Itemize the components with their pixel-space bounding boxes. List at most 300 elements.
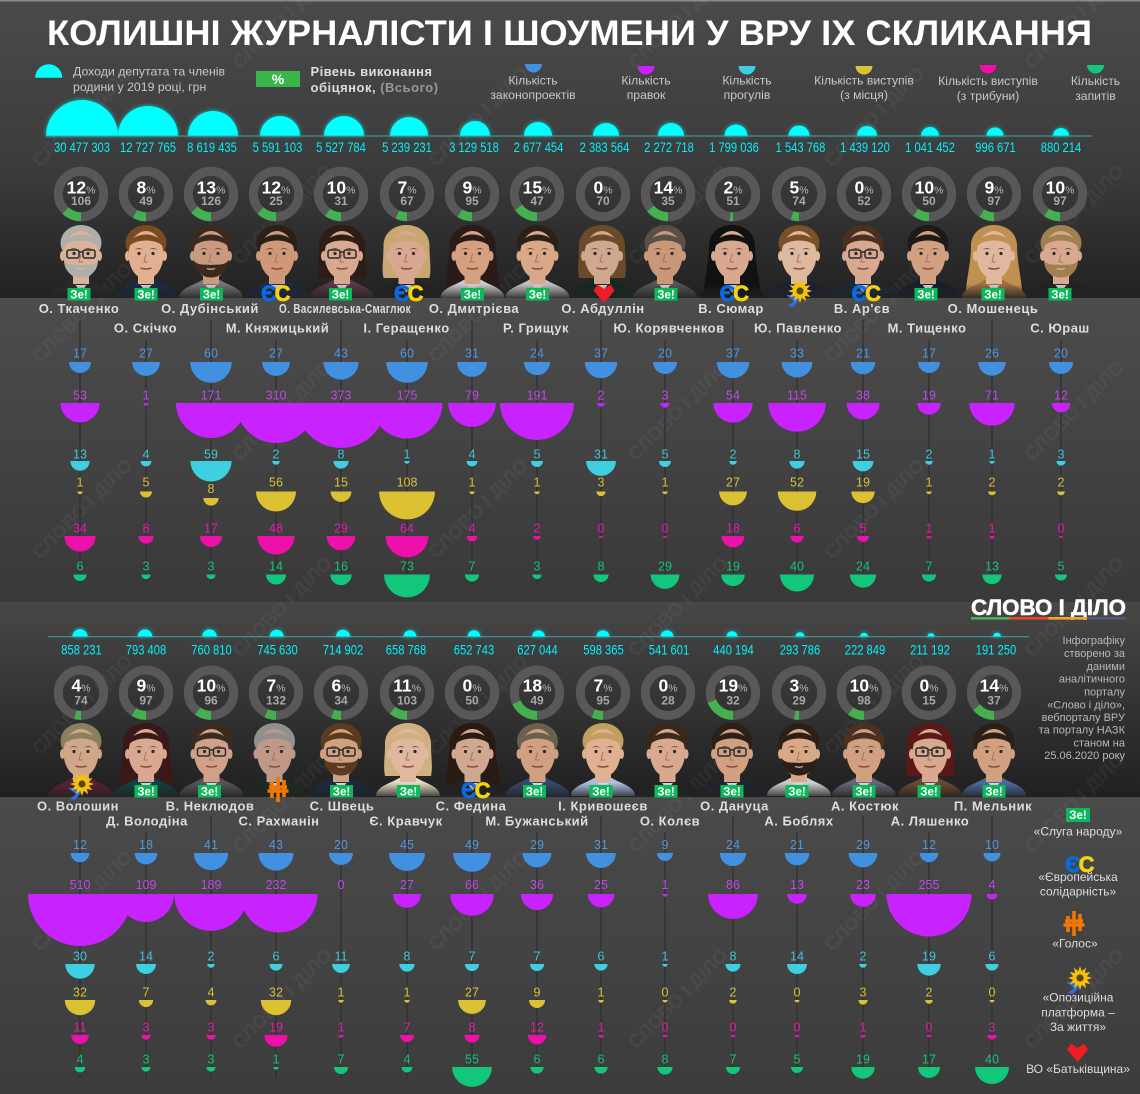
- party badges: top row: ЄС: [720, 281, 749, 306]
- promise rings: top row: 31: [334, 194, 348, 208]
- legend: promise fulfilment: %: [272, 71, 285, 87]
- activity column: О. Волошин: 30: [73, 950, 87, 964]
- source note: станом на: [1073, 738, 1126, 750]
- legend: absences: [722, 66, 772, 102]
- names: bottom row: О. Колєв: [640, 814, 700, 828]
- activity column: Д. Володіна: 14: [139, 950, 153, 964]
- promise rings: bottom row: 32: [726, 694, 740, 708]
- activity column: С. Федина: [450, 816, 494, 1087]
- activity column: І. Кривошеєв: 6: [598, 950, 605, 964]
- promise rings: top row: 106: [71, 194, 91, 208]
- promise rings: top row: 14%: [654, 178, 682, 198]
- activity column: О. Дануца: 0: [730, 1020, 737, 1034]
- activity column: Ю. Павленко: 6: [794, 522, 801, 536]
- activity column: А. Боблях: 0: [794, 986, 801, 1000]
- income chart: bottom row: 858 231: [61, 642, 102, 658]
- watermarks: СЛОВО І ДІЛО: [821, 847, 929, 956]
- promise rings: top row: 13%: [197, 178, 225, 198]
- activity column: М. Тищенко: 2: [926, 448, 933, 462]
- activity column: Є. Кравчук: 45: [400, 838, 414, 852]
- activity column: В. Сюмар: 27: [726, 476, 740, 490]
- activity column: Ю. Павленко: 115: [787, 388, 807, 402]
- income chart: bottom row: 222 849: [845, 642, 885, 658]
- income chart: bottom row: 598 365: [583, 642, 624, 658]
- activity column: М. Бужанський: [521, 832, 553, 1078]
- names: top row: О. Скічко: [114, 320, 177, 336]
- names: top row: [39, 301, 1090, 336]
- income chart: top row: 1 041 452: [905, 140, 955, 155]
- activity column: В. Неклюдов: 4: [208, 986, 215, 1000]
- legend: promise fulfilment: Рівень виконання: [310, 64, 432, 79]
- activity column: І. Геращенко: 64: [400, 522, 414, 536]
- activity column: С. Швець: 1: [338, 1020, 345, 1034]
- names: top row: О. Абдуллін: [561, 301, 645, 316]
- names: bottom row: А. Костюк: [831, 798, 899, 814]
- watermarks: СЛОВО І ДІЛО: [229, 749, 337, 858]
- activity column: О. Волошин: 32: [73, 986, 87, 1000]
- activity column: О. Абдуллін: 31: [594, 448, 608, 462]
- activity column: М. Княжицький: 48: [269, 522, 283, 536]
- activity column: А. Костюк: 1: [860, 1020, 867, 1034]
- party legend: Голос: [1052, 911, 1098, 950]
- activity column: В. Ар'єв: [846, 320, 880, 588]
- party legend: Європейська солідарність: ЄС: [1065, 852, 1095, 877]
- activity column: С. Швець: 7: [338, 1052, 345, 1066]
- activity column: А. Ляшенко: 0: [926, 1020, 933, 1034]
- promise rings: bottom row: 29: [792, 694, 806, 708]
- activity column: О. Дмитрієва: 4: [469, 448, 476, 462]
- source note: та порталу НАЗК: [1039, 724, 1126, 736]
- activity column: О. Дмитрієва: 31: [465, 346, 479, 360]
- promise rings: top row: 7%: [397, 178, 417, 198]
- names: bottom row: А. Ляшенко: [891, 814, 969, 828]
- promise rings: bottom row: 49: [530, 694, 544, 708]
- promise rings: top row: 10%: [327, 178, 355, 198]
- names: bottom row: П. Мельник: [954, 798, 1032, 814]
- activity column: О. Дануца: [708, 816, 758, 1078]
- party badges: top row: Зе!: [464, 290, 481, 302]
- activity column: О. Дануца: 2: [730, 986, 737, 1000]
- promise rings: top row: 97: [1053, 194, 1067, 208]
- activity column: А. Костюк: 3: [860, 986, 867, 1000]
- activity column: Р. Грищук: 1: [534, 476, 541, 490]
- activity column: О. Дмитрієва: 79: [465, 388, 479, 402]
- activity column: В. Неклюдов: 2: [208, 950, 215, 964]
- activity column: М. Бужанський: 36: [530, 878, 544, 892]
- watermarks: СЛОВО І ДІЛО: [1021, 945, 1129, 1054]
- activity column: О. Дубінський: [176, 320, 246, 585]
- income chart: bottom row: 293 786: [780, 642, 820, 658]
- watermarks: СЛОВО І ДІЛО: [1021, 161, 1129, 270]
- activity column: О. Дануца: 24: [726, 838, 740, 852]
- activity column: Р. Грищук: 24: [530, 346, 544, 360]
- activity column: О. Колєв: 1: [662, 878, 669, 892]
- party legend: Опозиційна платформа: платформа –: [1041, 1006, 1115, 1020]
- activity column: С. Рахманін: [240, 832, 318, 1078]
- activity column: О. Ткаченко: 34: [73, 522, 87, 536]
- legend: bills: законопроектів: [490, 88, 576, 102]
- activity column: М. Тищенко: 1: [926, 522, 933, 536]
- names: top row: М. Княжицький: [226, 320, 329, 336]
- activity column: О. Скічко: 27: [139, 346, 153, 360]
- activity column: С. Рахманін: 232: [266, 878, 286, 892]
- source note: 25.06.2020 року: [1044, 750, 1126, 762]
- activity column: О. Дануца: 8: [730, 950, 737, 964]
- activity column: П. Мельник: 3: [989, 1020, 996, 1034]
- legend: bills: Кількість: [508, 74, 558, 88]
- names: bottom row: Є. Кравчук: [369, 814, 443, 828]
- activity column: Р. Грищук: 3: [534, 560, 541, 574]
- activity column: О. Ткаченко: 1: [77, 476, 84, 490]
- watermarks: СЛОВО І ДІЛО: [229, 161, 337, 270]
- party badges: top row: Зе!: [70, 290, 88, 302]
- activity column: А. Боблях: [785, 832, 809, 1078]
- legend: speeches from rostrum: [938, 65, 1038, 103]
- activity column: І. Геращенко: 73: [400, 560, 414, 574]
- activity column: О. Мошенець: 13: [985, 560, 999, 574]
- activity column: С. Юраш: 3: [1058, 448, 1065, 462]
- source note: порталу: [1084, 686, 1125, 698]
- activity column: І. Геращенко: 1: [404, 448, 411, 462]
- activity column: В. Неклюдов: [174, 816, 248, 1078]
- activity column: О. Ткаченко: 6: [77, 560, 84, 574]
- activity column: С. Федина: 7: [469, 950, 476, 964]
- party legend: Європейська солідарність: [1038, 852, 1118, 898]
- activity column: Ю. Корявченков: 29: [658, 560, 672, 574]
- source note: аналітичного: [1059, 674, 1125, 686]
- activity column: В. Ар'єв: 38: [856, 388, 870, 402]
- promise rings: top row: 25: [269, 194, 283, 208]
- promise rings: bottom row: 7%: [266, 676, 286, 696]
- activity column: В. Ар'єв: 5: [860, 522, 867, 536]
- activity column: А. Боблях: 0: [794, 1020, 801, 1034]
- names: top row: О. Ткаченко: [39, 301, 119, 316]
- watermarks: СЛОВО І ДІЛО: [1021, 553, 1129, 662]
- activity column: Є. Кравчук: 7: [404, 1020, 411, 1034]
- logo: Слово і діло: СЛОВО І ДІЛО: [971, 595, 1126, 620]
- activity column: В. Сюмар: 19: [726, 560, 740, 574]
- activity column: М. Княжицький: 27: [269, 346, 283, 360]
- promise rings: top row: 0%: [593, 178, 613, 198]
- activity column: Ю. Корявченков: 1: [662, 476, 669, 490]
- activity column: О. Волошин: 510: [70, 878, 90, 892]
- activity column: А. Боблях: 21: [790, 838, 804, 852]
- watermarks: СЛОВО І ДІЛО: [821, 259, 929, 368]
- activity column: Д. Володіна: 3: [143, 1052, 150, 1066]
- promise rings: bottom row: 103: [397, 694, 417, 708]
- party legend: Слуга народу: [1034, 808, 1123, 838]
- activity column: С. Федина: 66: [465, 878, 479, 892]
- watermarks: СЛОВО І ДІЛО: [425, 63, 533, 172]
- activity column: І. Кривошеєв: 25: [594, 878, 608, 892]
- activity column: О. Дубінський: 3: [208, 560, 215, 574]
- activity column: А. Костюк: 2: [860, 950, 867, 964]
- names: bottom row: О. Дануца: [700, 798, 769, 814]
- names: top row: О. Дубінський: [161, 301, 259, 316]
- promise rings: top row: 49: [139, 194, 153, 208]
- income chart: top row: 2 383 564: [580, 140, 629, 155]
- legend: promise fulfilment: [256, 64, 439, 95]
- activity column: О. Абдуллін: 37: [594, 346, 608, 360]
- activity column: О. Абдуллін: 3: [598, 476, 605, 490]
- activity column: М. Бужанський: 12: [530, 1020, 544, 1034]
- promise rings: bottom row: [58, 670, 1017, 715]
- names: bottom row: Д. Володіна: [106, 814, 188, 828]
- watermarks: СЛОВО І ДІЛО: [29, 455, 137, 564]
- activity column: О. Волошин: 4: [77, 1052, 84, 1066]
- legend: speeches from seat: [814, 66, 914, 102]
- activity column: О. Дмитрієва: 4: [469, 522, 476, 536]
- portraits: bottom row: [46, 723, 1031, 797]
- promise rings: top row: 97: [987, 194, 1001, 208]
- promise rings: bottom row: 10%: [850, 676, 878, 696]
- activity column: І. Кривошеєв: 31: [594, 838, 608, 852]
- activity column: О. Дубінський: 171: [201, 388, 221, 402]
- activity column: А. Боблях: 14: [790, 950, 804, 964]
- legend: amendments: [621, 66, 671, 102]
- activity column: А. Ляшенко: 19: [922, 950, 936, 964]
- activity column: О. Колєв: 0: [662, 1020, 669, 1034]
- activity column: О. Дубінський: 17: [204, 522, 218, 536]
- activity column: С. Федина: 55: [465, 1052, 479, 1066]
- activity column: Р. Грищук: 5: [534, 448, 541, 462]
- names: bottom row: С. Рахманін: [238, 814, 320, 828]
- party badges: bottom row: Зе!: [985, 786, 1003, 798]
- watermarks: СЛОВО І ДІЛО: [425, 259, 533, 368]
- activity column: О. Дубінський: 8: [208, 482, 215, 496]
- promise rings: bottom row: 95: [596, 694, 610, 708]
- promise rings: bottom row: 18%: [523, 676, 551, 696]
- names: top row: Ю. Корявченков: [613, 320, 725, 336]
- activity column: О. Ткаченко: 53: [73, 388, 87, 402]
- names: top row: М. Тищенко: [888, 320, 966, 336]
- income chart: top row: 996 671: [975, 140, 1016, 155]
- watermarks: СЛОВО І ДІЛО: [625, 553, 733, 662]
- watermarks: СЛОВО І ДІЛО: [625, 161, 733, 270]
- party badges: bottom row: ЄС: [461, 778, 491, 803]
- party badges: bottom row: Зе!: [201, 786, 218, 798]
- activity column: В. Неклюдов: 41: [204, 838, 218, 852]
- activity column: І. Геращенко: 175: [397, 388, 417, 402]
- income chart: top row: 2 272 718: [644, 140, 694, 155]
- activity column: В. Ар'єв: 15: [856, 448, 870, 462]
- activity column: Д. Володіна: 109: [136, 878, 156, 892]
- activity column: С. Швець: 20: [334, 838, 348, 852]
- activity column: О. Дмитрієва: [448, 320, 496, 585]
- party badges: top row: Зе!: [1051, 290, 1069, 302]
- party legend: Батьківщина: ВО «Батьківщина»: [1026, 1062, 1130, 1076]
- activity column: О. Василевська-Смаглюк: 16: [334, 560, 348, 574]
- income chart: bottom row: 191 250: [976, 642, 1016, 658]
- promise rings: top row: 50: [922, 194, 936, 208]
- activity column: П. Мельник: 4: [989, 878, 996, 892]
- activity column: В. Сюмар: [713, 320, 753, 586]
- activity column: А. Костюк: 19: [856, 1052, 870, 1066]
- watermarks: СЛОВО І ДІЛО: [229, 357, 337, 466]
- party legend: Опозиційна платформа: «Опозиційна: [1043, 990, 1114, 1004]
- income chart: top row: 880 214: [1041, 140, 1081, 155]
- promise rings: bottom row: 0%: [919, 676, 939, 696]
- names: top row: С. Юраш: [1030, 320, 1090, 336]
- watermarks: СЛОВО І ДІЛО: [29, 63, 137, 172]
- party legend: Опозиційна платформа: [1041, 966, 1115, 1034]
- activity column: Ю. Корявченков: [651, 340, 679, 589]
- promise rings: top row: 67: [400, 194, 414, 208]
- party badges: bottom row: Зе!: [788, 786, 806, 798]
- watermarks: СЛОВО І ДІЛО: [1021, 357, 1129, 466]
- activity column: С. Рахманін: 1: [273, 1052, 280, 1066]
- names: bottom row: М. Бужанський: [485, 814, 589, 828]
- promise rings: top row: 47: [530, 194, 544, 208]
- activity column: М. Тищенко: 19: [922, 388, 936, 402]
- income chart: top row: 1 439 120: [840, 140, 890, 155]
- activity column: О. Скічко: 8: [143, 522, 150, 536]
- income chart: bottom row: 440 194: [713, 642, 754, 658]
- activity column: М. Бужанський: 7: [534, 950, 541, 964]
- legend: promise fulfilment: обіцянок, (Всього): [310, 80, 439, 95]
- activity column: А. Ляшенко: 255: [919, 878, 939, 892]
- activity column: В. Ар'єв: 24: [856, 560, 870, 574]
- activity column: В. Ар'єв: 19: [856, 476, 870, 490]
- activity column: О. Волошин: 11: [74, 1020, 87, 1034]
- promise rings: bottom row: 37: [987, 694, 1001, 708]
- activity column: О. Василевська-Смаглюк: 43: [334, 346, 348, 360]
- promise rings: top row: 15%: [523, 178, 551, 198]
- activity column: С. Рахманін: 19: [269, 1020, 283, 1034]
- activity column: А. Боблях: 13: [790, 878, 804, 892]
- activity column: М. Тищенко: 7: [926, 560, 933, 574]
- activity column: С. Юраш: 5: [1058, 560, 1065, 574]
- activity column: О. Мошенець: 1: [989, 448, 996, 462]
- party badges: top row: Зе!: [203, 290, 220, 302]
- party badges: top row: Зе!: [984, 290, 1002, 302]
- promise rings: bottom row: 97: [139, 694, 153, 708]
- activity column: О. Колєв: 0: [662, 986, 669, 1000]
- income chart: top row: 30 477 303: [54, 140, 110, 155]
- activity column: Ю. Корявченков: 5: [662, 448, 669, 462]
- activity column: О. Ткаченко: [60, 320, 100, 585]
- activity column: С. Юраш: 0: [1058, 522, 1065, 536]
- activity column: В. Ар'єв: 21: [856, 346, 870, 360]
- promise rings: top row: 95: [465, 194, 479, 208]
- income chart: top row: 12 727 765: [120, 140, 176, 155]
- party legend: Батьківщина: [1026, 1044, 1130, 1076]
- party badges: bottom row: Зе!: [137, 786, 155, 798]
- activity column: О. Дубінський: 59: [204, 448, 218, 462]
- promise rings: top row: 12%: [67, 178, 95, 198]
- title: КОЛИШНІ ЖУРНАЛІСТИ І ШОУМЕНИ У ВРУ ІХ СКЛИКАННЯ: [47, 14, 1092, 53]
- income chart: bottom row: 541 601: [649, 642, 689, 658]
- activity column: Ю. Павленко: 40: [790, 560, 804, 574]
- activity column: Є. Кравчук: 8: [404, 950, 411, 964]
- activity column: О. Мошенець: [969, 320, 1015, 585]
- activity column: О. Василевська-Смаглюк: 29: [334, 522, 348, 536]
- promise rings: top row: 10%: [1046, 178, 1074, 198]
- activity column: І. Кривошеєв: 6: [598, 1052, 605, 1066]
- income chart: top row: 1 799 036: [709, 140, 759, 155]
- activity column: Д. Володіна: [118, 832, 174, 1078]
- watermarks: СЛОВО І ДІЛО: [1021, 749, 1129, 858]
- activity column: С. Федина: 8: [469, 1020, 476, 1034]
- activity column: М. Княжицький: 56: [269, 476, 283, 490]
- watermarks: СЛОВО І ДІЛО: [229, 553, 337, 662]
- activity column: О. Абдуллін: 2: [598, 388, 605, 402]
- income chart: top row: 5 239 231: [382, 140, 432, 155]
- income chart: top row: [46, 100, 1092, 155]
- activity column: О. Абдуллін: 0: [598, 522, 605, 536]
- activity column: М. Тищенко: [917, 340, 941, 585]
- legend: speeches from seat: (з місця): [840, 88, 888, 102]
- activity column: А. Ляшенко: 2: [926, 986, 933, 1000]
- promise rings: bottom row: 96: [204, 694, 218, 708]
- activity column: І. Геращенко: [372, 340, 442, 597]
- activity column: О. Дануца: 86: [726, 878, 740, 892]
- legend: amendments: Кількість: [621, 74, 671, 88]
- names: bottom row: С. Швець: [310, 798, 374, 814]
- promise rings: bottom row: 3%: [789, 676, 809, 696]
- activity column: Ю. Корявченков: 3: [662, 388, 669, 402]
- activity column: С. Рахманін: 32: [269, 986, 283, 1000]
- income chart: bottom row: 714 902: [323, 642, 363, 658]
- activity column: М. Княжицький: 2: [273, 448, 280, 462]
- promise rings: top row: [58, 171, 1083, 217]
- promise rings: bottom row: 4%: [71, 676, 91, 696]
- activity column: О. Скічко: [132, 340, 160, 585]
- names: top row: Ю. Павленко: [754, 320, 842, 336]
- watermarks: СЛОВО І ДІЛО: [625, 945, 733, 1054]
- activity column: П. Мельник: [975, 816, 1009, 1084]
- activity column: С. Рахманін: 6: [273, 950, 280, 964]
- promise rings: top row: 70: [596, 194, 610, 208]
- activity column: О. Абдуллін: 8: [598, 560, 605, 574]
- activity column: А. Боблях: 5: [794, 1052, 801, 1066]
- promise rings: top row: 126: [201, 194, 221, 208]
- activity column: О. Ткаченко: 13: [73, 448, 87, 462]
- promise rings: bottom row: 132: [266, 694, 286, 708]
- watermarks: СЛОВО І ДІЛО: [625, 357, 733, 466]
- activity column: І. Геращенко: 60: [400, 346, 414, 360]
- party legend: Слуга народу: Зе!: [1069, 810, 1087, 822]
- activity column: О. Скічко: 4: [143, 448, 150, 462]
- legend: absences: Кількість: [722, 74, 772, 88]
- names: bottom row: І. Кривошеєв: [558, 798, 648, 814]
- party badges: bottom row: Зе!: [526, 786, 543, 798]
- activity column: М. Бужанський: 29: [530, 838, 544, 852]
- legend: speeches from seat: Кількість виступів: [814, 74, 914, 88]
- activity column: О. Колєв: [657, 832, 673, 1078]
- promise rings: top row: 0%: [854, 178, 874, 198]
- names: top row: О. Мошенець: [948, 301, 1038, 316]
- watermarks: СЛОВО І ДІЛО: [425, 651, 533, 760]
- portraits: top row: [46, 225, 1096, 298]
- activity column: Р. Грищук: [500, 340, 574, 585]
- activity column: О. Дубінський: 60: [204, 346, 218, 360]
- names: bottom row: А. Боблях: [764, 814, 834, 828]
- source note: створено за: [1064, 648, 1126, 660]
- activity column: А. Ляшенко: [886, 832, 972, 1078]
- activity column: Є. Кравчук: 4: [404, 1052, 411, 1066]
- promise rings: top row: 8%: [136, 178, 156, 198]
- activity column: В. Сюмар: 18: [726, 522, 740, 536]
- party legend: Голос: «Голос»: [1052, 936, 1098, 950]
- activity column: А. Костюк: 29: [856, 838, 870, 852]
- activity column: Є. Кравчук: 1: [404, 986, 411, 1000]
- legend: speeches from rostrum: (з трибуни): [957, 89, 1019, 103]
- party badges: top row: ЄС: [261, 281, 291, 306]
- party badges: bottom row: Зе!: [400, 786, 417, 798]
- legend: income: родини у 2019 році, грн: [73, 80, 206, 94]
- watermarks: СЛОВО І ДІЛО: [625, 749, 733, 858]
